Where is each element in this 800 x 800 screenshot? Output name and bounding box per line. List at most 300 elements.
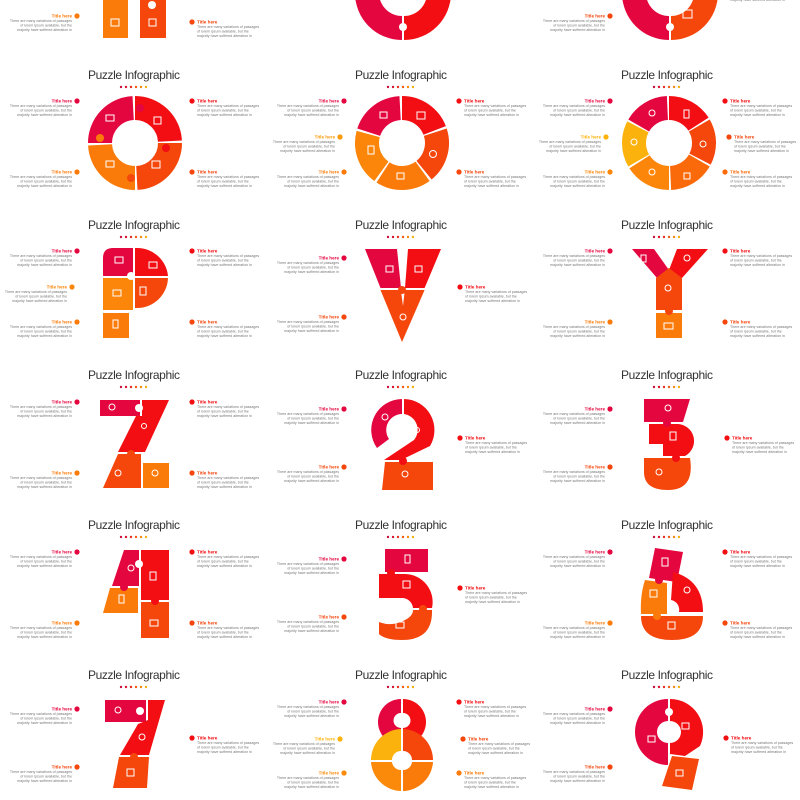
- text items: of lorem ipsum available, but the: [287, 710, 339, 714]
- title: Puzzle Infographic: [621, 518, 713, 532]
- text items: Title here: [319, 557, 339, 562]
- text items: of lorem ipsum available, but the: [731, 746, 783, 750]
- text items: [277, 406, 527, 483]
- text items: majority have suffered alteration in: [465, 299, 520, 303]
- text items: majority have suffered alteration in: [550, 779, 605, 783]
- text items: Title here: [197, 736, 218, 741]
- text items: [10, 399, 259, 489]
- text items: of lorem ipsum available, but the: [730, 108, 782, 112]
- text items: There are many variations of passages: [197, 476, 259, 480]
- text items: Title here: [52, 400, 72, 405]
- text items: of lorem ipsum available, but the: [20, 258, 72, 262]
- text items: Title here: [197, 471, 218, 476]
- text items: [10, 98, 259, 188]
- text items: There are many variations of passages: [10, 555, 72, 559]
- panel: 8: [273, 668, 530, 791]
- digit 4: [103, 550, 169, 638]
- text items: Title here: [197, 320, 218, 325]
- text items: Title here: [319, 256, 339, 261]
- text items: majority have suffered alteration in: [546, 149, 601, 153]
- panel: 5: [277, 518, 527, 640]
- text items: Title here: [52, 765, 72, 770]
- text items: of lorem ipsum available, but the: [287, 266, 339, 270]
- text items: Title here: [52, 249, 72, 254]
- digit 9: [635, 699, 703, 790]
- text items: There are many variations of passages: [464, 104, 526, 108]
- text items: Title here: [585, 765, 605, 770]
- text items: majority have suffered alteration in: [197, 184, 252, 188]
- text items: majority have suffered alteration in: [284, 785, 339, 789]
- text items: majority have suffered alteration in: [197, 564, 252, 568]
- text items: of lorem ipsum available, but the: [287, 108, 339, 112]
- text items: Title here: [730, 249, 751, 254]
- text items: Title here: [197, 621, 218, 626]
- text items: There are many variations of passages: [10, 175, 72, 179]
- text items: There are many variations of passages: [197, 555, 259, 559]
- text items: of lorem ipsum available, but the: [464, 780, 516, 784]
- text items: There are many variations of passages: [465, 591, 527, 595]
- text items: [10, 706, 259, 783]
- text items: [539, 98, 796, 188]
- text items: majority have suffered alteration in: [284, 329, 339, 333]
- digit 2: [371, 399, 434, 490]
- text items: Title here: [197, 170, 218, 175]
- text items: majority have suffered alteration in: [550, 479, 605, 483]
- text items: There are many variations of passages: [543, 325, 605, 329]
- text items: of lorem ipsum available, but the: [465, 294, 517, 298]
- text items: of lorem ipsum available, but the: [730, 258, 782, 262]
- text item left: of lorem ipsum available, but the: [553, 24, 605, 28]
- text items: There are many variations of passages: [730, 325, 792, 329]
- ring halves: [622, 0, 718, 40]
- text items: Title here: [585, 621, 605, 626]
- title: Puzzle Infographic: [355, 368, 447, 382]
- text items: There are many variations of passages: [277, 261, 339, 265]
- text items: of lorem ipsum available, but the: [197, 180, 249, 184]
- text items: Title here: [47, 285, 67, 290]
- text items: of lorem ipsum available, but the: [734, 144, 786, 148]
- text items: [5, 248, 259, 338]
- text item left: Title here: [52, 14, 72, 19]
- text items: of lorem ipsum available, but the: [20, 774, 72, 778]
- text items: majority have suffered alteration in: [550, 421, 605, 425]
- text items: Title here: [52, 707, 72, 712]
- text items: Title here: [319, 315, 339, 320]
- text items: of lorem ipsum available, but the: [287, 180, 339, 184]
- text items: of lorem ipsum available, but the: [197, 330, 249, 334]
- text items: of lorem ipsum available, but the: [465, 446, 517, 450]
- text items: majority have suffered alteration in: [197, 485, 252, 489]
- text items: majority have suffered alteration in: [12, 299, 67, 303]
- text items: majority have suffered alteration in: [280, 751, 335, 755]
- title: Puzzle Infographic: [621, 368, 713, 382]
- text items: majority have suffered alteration in: [730, 635, 785, 639]
- text items: There are many variations of passages: [277, 562, 339, 566]
- dots: [120, 536, 147, 538]
- text items: [273, 699, 530, 789]
- panel: Z: [10, 368, 259, 489]
- text items: majority have suffered alteration in: [732, 450, 787, 454]
- text items: majority have suffered alteration in: [17, 184, 72, 188]
- text item left: of lorem ipsum available, but the: [20, 24, 72, 28]
- text item left: majority have suffered alteration in: [17, 28, 72, 32]
- text items: Title here: [52, 170, 72, 175]
- text items: Title here: [319, 170, 339, 175]
- text items: Title here: [52, 99, 72, 104]
- text items: There are many variations of passages: [543, 412, 605, 416]
- text items: majority have suffered alteration in: [17, 635, 72, 639]
- text items: of lorem ipsum available, but the: [283, 746, 335, 750]
- dots: [387, 686, 414, 688]
- text items: [277, 255, 527, 333]
- title: Puzzle Infographic: [355, 218, 447, 232]
- text items: There are many variations of passages: [277, 705, 339, 709]
- text items: Title here: [319, 407, 339, 412]
- text items: of lorem ipsum available, but the: [553, 630, 605, 634]
- text items: There are many variations of passages: [277, 320, 339, 324]
- text item left: There are many variations of passages: [10, 19, 72, 23]
- text items: There are many variations of passages: [197, 325, 259, 329]
- text items: majority have suffered alteration in: [17, 113, 72, 117]
- panel: 7: [10, 668, 259, 788]
- text items: of lorem ipsum available, but the: [20, 560, 72, 564]
- text items: There are many variations of passages: [464, 776, 526, 780]
- text items: Title here: [319, 99, 339, 104]
- text items: majority have suffered alteration in: [730, 184, 785, 188]
- dots: [120, 86, 147, 88]
- text items: [543, 406, 794, 483]
- text items: majority have suffered alteration in: [734, 149, 789, 153]
- text items: [277, 556, 527, 633]
- panel: 9: [543, 668, 793, 790]
- text items: Title here: [465, 285, 486, 290]
- text items: Title here: [465, 436, 486, 441]
- text items: Title here: [732, 436, 753, 441]
- text items: majority have suffered alteration in: [550, 635, 605, 639]
- text items: majority have suffered alteration in: [17, 779, 72, 783]
- text items: of lorem ipsum available, but the: [287, 624, 339, 628]
- text items: majority have suffered alteration in: [550, 113, 605, 117]
- text items: of lorem ipsum available, but the: [283, 144, 335, 148]
- dots: [653, 686, 680, 688]
- text items: There are many variations of passages: [465, 290, 527, 294]
- text items: There are many variations of passages: [734, 140, 796, 144]
- text items: There are many variations of passages: [10, 405, 72, 409]
- text items: of lorem ipsum available, but the: [730, 330, 782, 334]
- text items: There are many variations of passages: [730, 175, 792, 179]
- text items: of lorem ipsum available, but the: [549, 144, 601, 148]
- text items: There are many variations of passages: [732, 441, 794, 445]
- panel: 4: [10, 518, 259, 639]
- text items: [543, 549, 792, 639]
- text items: There are many variations of passages: [197, 405, 259, 409]
- text items: majority have suffered alteration in: [284, 421, 339, 425]
- title: Puzzle Infographic: [88, 68, 180, 82]
- text items: [543, 706, 793, 783]
- text items: There are many variations of passages: [464, 175, 526, 179]
- text items: of lorem ipsum available, but the: [553, 716, 605, 720]
- text items: Title here: [585, 170, 605, 175]
- text item right: There are many variations of passages: [197, 25, 259, 29]
- text items: There are many variations of passages: [543, 626, 605, 630]
- text item left: majority have suffered alteration in: [550, 28, 605, 32]
- text items: There are many variations of passages: [10, 254, 72, 258]
- text items: of lorem ipsum available, but the: [20, 180, 72, 184]
- title: Puzzle Infographic: [88, 218, 180, 232]
- text items: majority have suffered alteration in: [17, 414, 72, 418]
- ring 6 pieces: [621, 95, 717, 191]
- text items: There are many variations of passages: [5, 290, 67, 294]
- text items: of lorem ipsum available, but the: [468, 746, 520, 750]
- text items: There are many variations of passages: [730, 254, 792, 258]
- text items: of lorem ipsum available, but the: [553, 180, 605, 184]
- text items: There are many variations of passages: [543, 555, 605, 559]
- text items: of lorem ipsum available, but the: [197, 108, 249, 112]
- panel: 2: [277, 368, 527, 490]
- text items: Title here: [730, 621, 751, 626]
- panel: Y: [543, 218, 792, 338]
- text items: of lorem ipsum available, but the: [20, 480, 72, 484]
- text items: of lorem ipsum available, but the: [464, 180, 516, 184]
- title: Puzzle Infographic: [88, 668, 180, 682]
- dots: [387, 86, 414, 88]
- text items: of lorem ipsum available, but the: [553, 774, 605, 778]
- text items: There are many variations of passages: [543, 770, 605, 774]
- text items: There are many variations of passages: [543, 104, 605, 108]
- text items: There are many variations of passages: [10, 325, 72, 329]
- text items: Title here: [731, 736, 752, 741]
- dots: [387, 386, 414, 388]
- text items: There are many variations of passages: [277, 776, 339, 780]
- panel: 6: [543, 518, 792, 640]
- text items: of lorem ipsum available, but the: [553, 560, 605, 564]
- text items: Title here: [730, 99, 751, 104]
- text items: Title here: [319, 771, 339, 776]
- text items: majority have suffered alteration in: [284, 184, 339, 188]
- text items: Title here: [464, 99, 485, 104]
- text items: majority have suffered alteration in: [197, 263, 252, 267]
- panel: 3: [543, 368, 794, 490]
- title: Puzzle Infographic: [621, 218, 713, 232]
- text items: majority have suffered alteration in: [464, 113, 519, 117]
- text items: majority have suffered alteration in: [465, 600, 520, 604]
- dots: [653, 86, 680, 88]
- text items: Title here: [197, 400, 218, 405]
- dots: [120, 686, 147, 688]
- text items: There are many variations of passages: [730, 626, 792, 630]
- digit 3: [644, 399, 694, 490]
- text items: majority have suffered alteration in: [731, 750, 786, 754]
- text items: majority have suffered alteration in: [730, 334, 785, 338]
- dots: [120, 386, 147, 388]
- text items: of lorem ipsum available, but the: [730, 630, 782, 634]
- text items: majority have suffered alteration in: [550, 334, 605, 338]
- text items: of lorem ipsum available, but the: [732, 446, 784, 450]
- panel: O4: [10, 68, 259, 188]
- text items: Title here: [52, 621, 72, 626]
- text items: of lorem ipsum available, but the: [197, 480, 249, 484]
- dots: [120, 236, 147, 238]
- text items: majority have suffered alteration in: [17, 564, 72, 568]
- ring halves: [355, 0, 451, 40]
- text items: [543, 248, 792, 338]
- text items: of lorem ipsum available, but the: [287, 780, 339, 784]
- text items: of lorem ipsum available, but the: [287, 474, 339, 478]
- ring 4 pieces: [96, 104, 170, 182]
- letter V: [365, 249, 441, 342]
- puzzle bars: [103, 0, 166, 38]
- letter Z: [100, 400, 169, 488]
- text items: Title here: [315, 135, 335, 140]
- text items: Title here: [319, 700, 339, 705]
- text items: There are many variations of passages: [273, 140, 335, 144]
- text items: Title here: [315, 737, 335, 742]
- text items: There are many variations of passages: [277, 470, 339, 474]
- digit 5: [379, 549, 433, 640]
- dots: [387, 536, 414, 538]
- text items: majority have suffered alteration in: [197, 113, 252, 117]
- text items: Title here: [468, 737, 489, 742]
- text items: There are many variations of passages: [730, 104, 792, 108]
- text items: There are many variations of passages: [277, 620, 339, 624]
- text items: of lorem ipsum available, but the: [287, 566, 339, 570]
- text items: [273, 98, 526, 188]
- panel: partial tile bars: [10, 0, 259, 38]
- panel: partial tile ring 2: [543, 0, 785, 40]
- text items: There are many variations of passages: [197, 741, 259, 745]
- text items: majority have suffered alteration in: [197, 635, 252, 639]
- text items: Title here: [585, 99, 605, 104]
- ring 5 pieces: [353, 94, 451, 192]
- text items: Title here: [319, 615, 339, 620]
- text items: of lorem ipsum available, but the: [287, 416, 339, 420]
- letter P: [103, 248, 168, 338]
- dots: [653, 536, 680, 538]
- text items: Title here: [581, 135, 601, 140]
- text items: of lorem ipsum available, but the: [20, 716, 72, 720]
- text items: majority have suffered alteration in: [17, 485, 72, 489]
- text items: majority have suffered alteration in: [197, 750, 252, 754]
- text items: majority have suffered alteration in: [468, 751, 523, 755]
- text items: majority have suffered alteration in: [730, 564, 785, 568]
- text item right: Title here: [197, 20, 218, 25]
- text items: There are many variations of passages: [543, 175, 605, 179]
- text items: of lorem ipsum available, but the: [197, 746, 249, 750]
- text items: Title here: [730, 170, 751, 175]
- title: Puzzle Infographic: [355, 518, 447, 532]
- text item left: [10, 13, 80, 32]
- text items: There are many variations of passages: [10, 626, 72, 630]
- panel: O6: [539, 68, 796, 191]
- title: Puzzle Infographic: [621, 68, 713, 82]
- text items: There are many variations of passages: [10, 712, 72, 716]
- text items: Title here: [585, 465, 605, 470]
- text items: majority have suffered alteration in: [730, 113, 785, 117]
- text items: of lorem ipsum available, but the: [20, 410, 72, 414]
- text items: There are many variations of passages: [543, 712, 605, 716]
- text items: majority have suffered alteration in: [284, 714, 339, 718]
- text item left: Title here: [585, 14, 605, 19]
- text items: majority have suffered alteration in: [550, 721, 605, 725]
- text items: of lorem ipsum available, but the: [464, 108, 516, 112]
- digit 8: [371, 699, 433, 791]
- letter Y: [632, 249, 708, 338]
- text items: majority have suffered alteration in: [17, 263, 72, 267]
- text items: Title here: [52, 550, 72, 555]
- text items: There are many variations of passages: [10, 476, 72, 480]
- text items: There are many variations of passages: [10, 104, 72, 108]
- text items: of lorem ipsum available, but the: [553, 330, 605, 334]
- text items: majority have suffered alteration in: [17, 334, 72, 338]
- panel: O5: [273, 68, 526, 192]
- text items: There are many variations of passages: [277, 175, 339, 179]
- text items: majority have suffered alteration in: [730, 263, 785, 267]
- text items: majority have suffered alteration in: [284, 270, 339, 274]
- panel: P: [5, 218, 259, 338]
- text items: Title here: [464, 700, 485, 705]
- title: Puzzle Infographic: [621, 668, 713, 682]
- text items: There are many variations of passages: [277, 412, 339, 416]
- text items: majority have suffered alteration in: [284, 571, 339, 575]
- text items: There are many variations of passages: [197, 254, 259, 258]
- text items: of lorem ipsum available, but the: [730, 560, 782, 564]
- text items: Title here: [734, 135, 755, 140]
- text items: majority have suffered alteration in: [197, 334, 252, 338]
- panel: V: [277, 218, 527, 342]
- text items: of lorem ipsum available, but the: [197, 258, 249, 262]
- dots: [653, 386, 680, 388]
- text items: There are many variations of passages: [277, 104, 339, 108]
- text items: Title here: [585, 249, 605, 254]
- text items: majority have suffered alteration in: [465, 450, 520, 454]
- text items: of lorem ipsum available, but the: [553, 416, 605, 420]
- text items: There are many variations of passages: [731, 741, 793, 745]
- text items: Title here: [465, 586, 486, 591]
- text item left: [543, 13, 613, 32]
- text items: There are many variations of passages: [273, 742, 335, 746]
- dots: [387, 236, 414, 238]
- text items: There are many variations of passages: [464, 705, 526, 709]
- text items: of lorem ipsum available, but the: [730, 180, 782, 184]
- text items: Title here: [730, 320, 751, 325]
- text items: Title here: [730, 550, 751, 555]
- text items: of lorem ipsum available, but the: [553, 108, 605, 112]
- text items: There are many variations of passages: [197, 104, 259, 108]
- text items: majority have suffered alteration in: [17, 721, 72, 725]
- text items: Title here: [585, 407, 605, 412]
- text items: There are many variations of passages: [10, 770, 72, 774]
- text items: of lorem ipsum available, but the: [197, 630, 249, 634]
- text items: There are many variations of passages: [197, 626, 259, 630]
- text items: majority have suffered alteration in: [464, 714, 519, 718]
- text items: Title here: [585, 550, 605, 555]
- text items: There are many variations of passages: [197, 175, 259, 179]
- title: Puzzle Infographic: [355, 68, 447, 82]
- title: Puzzle Infographic: [88, 368, 180, 382]
- text items: majority have suffered alteration in: [550, 263, 605, 267]
- text items: Title here: [197, 249, 218, 254]
- text items: majority have suffered alteration in: [464, 785, 519, 789]
- text items: [10, 549, 259, 639]
- text items: Title here: [52, 471, 72, 476]
- text items: majority have suffered alteration in: [280, 149, 335, 153]
- text items: of lorem ipsum available, but the: [465, 596, 517, 600]
- text items: There are many variations of passages: [465, 441, 527, 445]
- text items: Title here: [197, 99, 218, 104]
- text item right: of lorem ipsum available, but the: [197, 30, 249, 34]
- text items: Title here: [52, 320, 72, 325]
- text items: of lorem ipsum available, but the: [20, 108, 72, 112]
